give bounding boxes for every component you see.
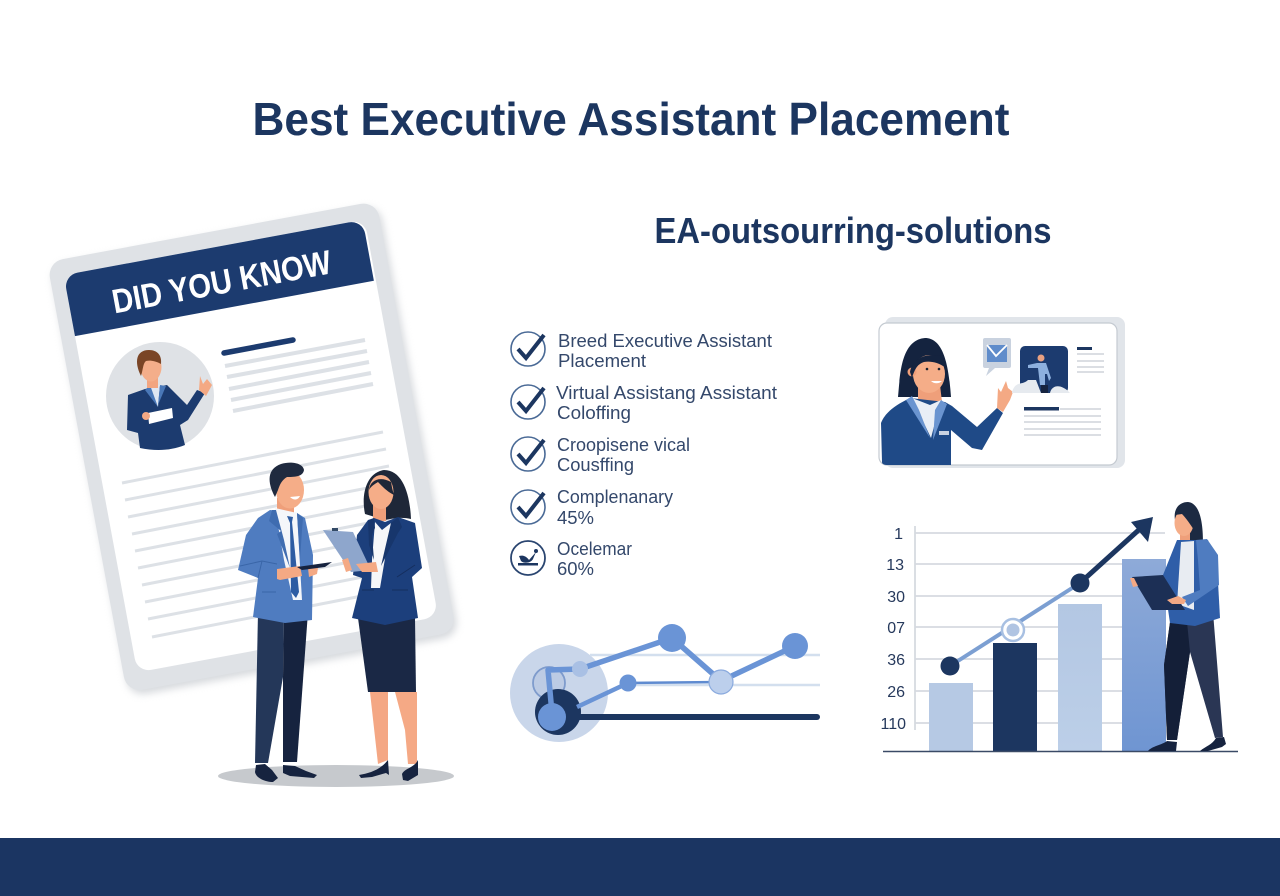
trousers <box>1164 608 1223 740</box>
ground shadow <box>218 765 454 787</box>
bars <box>929 683 973 751</box>
head <box>277 498 294 514</box>
presenter woman <box>881 338 1013 465</box>
card text lines <box>1024 347 1104 435</box>
line chart illustration <box>510 624 820 742</box>
item 2: Coloffing <box>557 403 631 423</box>
item 5: 60% <box>557 559 594 579</box>
lapels <box>368 517 402 566</box>
axis labels: 07 <box>887 620 905 637</box>
heading bar on document <box>224 340 293 353</box>
item 1: Placement <box>558 351 646 371</box>
long text lines on document <box>122 432 413 637</box>
item 4 <box>511 487 673 528</box>
shoes <box>359 760 389 778</box>
shoes <box>1148 737 1226 751</box>
short text lines on document <box>225 340 373 411</box>
item 4: Complenanary <box>557 487 673 507</box>
hands <box>342 558 352 572</box>
axis labels: 36 <box>887 652 905 669</box>
axis labels: 13 <box>886 557 904 574</box>
clipboard <box>323 530 371 572</box>
item 3: Cousffing <box>557 455 634 475</box>
tablet <box>297 562 332 570</box>
item 3 <box>511 435 690 475</box>
jacket <box>1163 540 1220 626</box>
item 2: Virtual Assistang Assistant <box>556 383 777 403</box>
legs <box>370 692 388 764</box>
clipboard <box>1132 575 1185 610</box>
axis labels: 26 <box>887 684 905 701</box>
portrait circle <box>106 342 214 450</box>
item 1: Breed Executive Assistant <box>558 331 772 351</box>
tie <box>287 516 299 598</box>
shirt <box>275 508 302 600</box>
item 5: Ocelemar <box>557 539 632 559</box>
title: Best Executive Assistant Placement <box>252 93 1010 145</box>
bar chart <box>880 502 1238 752</box>
item 2 <box>511 383 777 423</box>
footer band <box>0 838 1280 896</box>
hands <box>277 566 302 580</box>
axis labels: 110 <box>880 716 906 733</box>
banner text: DID YOU KNOW <box>109 243 335 321</box>
axis labels <box>880 526 906 733</box>
hands <box>1130 578 1138 587</box>
woman with clipboard <box>323 470 422 781</box>
shirt <box>1177 541 1194 610</box>
skirt <box>358 618 416 692</box>
trend arrow <box>940 517 1153 676</box>
jacket <box>238 510 313 623</box>
sleeve <box>1182 539 1219 606</box>
axis labels: 1 <box>894 526 903 543</box>
hair <box>1175 502 1203 543</box>
checklist <box>511 331 777 579</box>
jacket <box>352 517 422 625</box>
sleeve and pocket lines <box>240 561 277 592</box>
subtitle: EA-outsourring-solutions <box>654 210 1052 251</box>
sleeve line <box>362 565 415 590</box>
speech bubble icon <box>983 338 1011 376</box>
grid lines <box>915 526 1165 730</box>
lapels <box>269 510 303 568</box>
panel: did you know document <box>47 201 459 697</box>
shirt <box>371 522 391 588</box>
shoes <box>255 764 317 782</box>
man with tablet <box>238 463 332 782</box>
item 1 <box>511 331 772 371</box>
axis labels: 30 <box>887 589 905 606</box>
hair <box>364 470 411 520</box>
presenter card <box>879 317 1125 468</box>
item 3: Croopisene vical <box>557 435 690 455</box>
item 4: 45% <box>557 508 594 528</box>
item 5 <box>511 539 632 579</box>
portrait figure <box>127 385 205 450</box>
trousers <box>255 612 284 763</box>
inset photo <box>1012 346 1070 393</box>
woman with clipboard <box>1130 502 1226 751</box>
